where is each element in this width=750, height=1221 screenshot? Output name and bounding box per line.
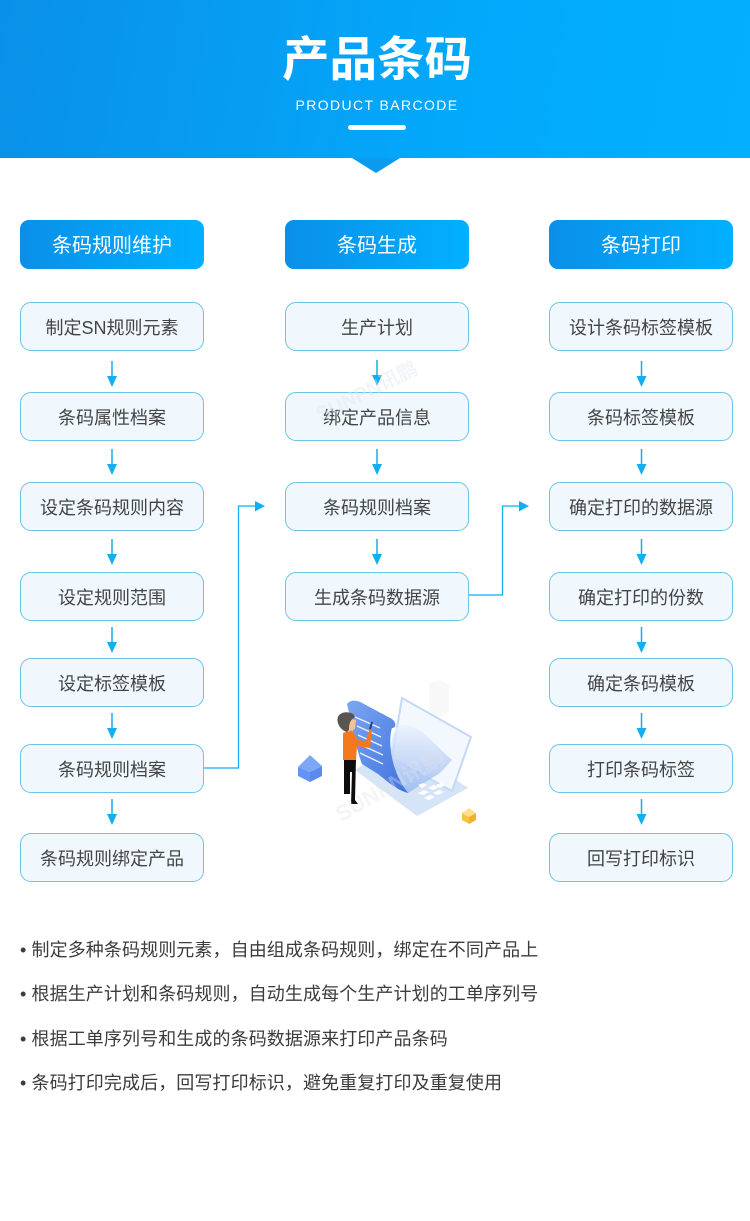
step: 确定打印的份数 (578, 588, 704, 608)
column heading: 条码生成: 条码生成 (337, 235, 417, 257)
step: 条码标签模板 (587, 408, 695, 428)
step (285, 572, 469, 621)
step: 条码规则绑定产品 (40, 849, 184, 869)
step: 设计条码标签模板 (569, 318, 713, 338)
step: 设定规则范围 (58, 588, 166, 608)
column heading: 条码打印 (549, 220, 733, 269)
laptop base (355, 742, 468, 816)
step (20, 833, 204, 882)
step (20, 572, 204, 621)
step (20, 392, 204, 441)
column 3 steps (549, 302, 733, 882)
step (549, 744, 733, 793)
face (348, 718, 356, 732)
watermark: SUNPN讯鹏 (313, 358, 421, 426)
illustration: person with barcode document and laptop (298, 696, 476, 824)
laptop screen (392, 698, 471, 791)
title underline bar (348, 125, 406, 130)
pen (370, 722, 372, 729)
step (549, 572, 733, 621)
bullet list (20, 940, 538, 1093)
bullet: • 根据生产计划和条码规则，自动生成每个生产计划的工单序列号 (20, 984, 538, 1004)
step: 条码规则档案 (323, 498, 431, 518)
step: 条码属性档案 (58, 408, 166, 428)
column heading: 条码打印: 条码打印 (601, 235, 681, 257)
step: 确定条码模板 (587, 674, 695, 694)
step: 绑定产品信息 (323, 408, 431, 428)
column 2 steps (285, 302, 469, 621)
step (285, 482, 469, 531)
bullet: • 条码打印完成后，回写打印标识，避免重复打印及重复使用 (20, 1073, 502, 1093)
step (285, 392, 469, 441)
subtitle: PRODUCT BARCODE (295, 97, 459, 113)
head hair (337, 712, 354, 732)
illustration watermark: SUNPN讯鹏 (331, 744, 448, 827)
column heading: 条码规则维护 (20, 220, 204, 269)
step (549, 392, 733, 441)
blue cube (298, 755, 322, 782)
step (20, 658, 204, 707)
column heading: 条码生成 (285, 220, 469, 269)
bullet: • 制定多种条码规则元素，自由组成条码规则，绑定在不同产品上 (20, 940, 538, 960)
step (285, 302, 469, 351)
header banner (0, 0, 750, 173)
person (337, 712, 372, 804)
step: 确定打印的数据源 (569, 498, 713, 518)
step: 制定SN规则元素 (45, 318, 178, 338)
header background (0, 0, 750, 158)
keypad dots (418, 783, 445, 800)
step: 回写打印标识 (587, 849, 695, 869)
column 1 steps (20, 302, 204, 882)
step (20, 744, 204, 793)
column heading: 条码规则维护: 条码规则维护 (52, 235, 172, 257)
faint background block (429, 680, 449, 718)
document text lines (355, 717, 383, 764)
step: 条码规则档案 (58, 760, 166, 780)
step: 生产计划 (341, 318, 413, 338)
step (549, 833, 733, 882)
step: 设定条码规则内容 (40, 498, 184, 518)
title: 产品条码 (282, 34, 472, 87)
step (549, 658, 733, 707)
blue document (347, 701, 408, 793)
step (549, 302, 733, 351)
curling sheet (391, 725, 452, 793)
step (20, 302, 204, 351)
header pointer triangle (352, 158, 400, 173)
step: 打印条码标签 (587, 760, 695, 780)
bullet: • 根据工单序列号和生成的条码数据源来打印产品条码 (20, 1029, 448, 1049)
yellow cube (462, 808, 476, 824)
torso and arm (343, 728, 372, 760)
step (20, 482, 204, 531)
step (549, 482, 733, 531)
legs (344, 758, 358, 804)
step: 设定标签模板 (58, 674, 166, 694)
step: 生成条码数据源 (314, 588, 440, 608)
flow arrows (107, 360, 646, 825)
